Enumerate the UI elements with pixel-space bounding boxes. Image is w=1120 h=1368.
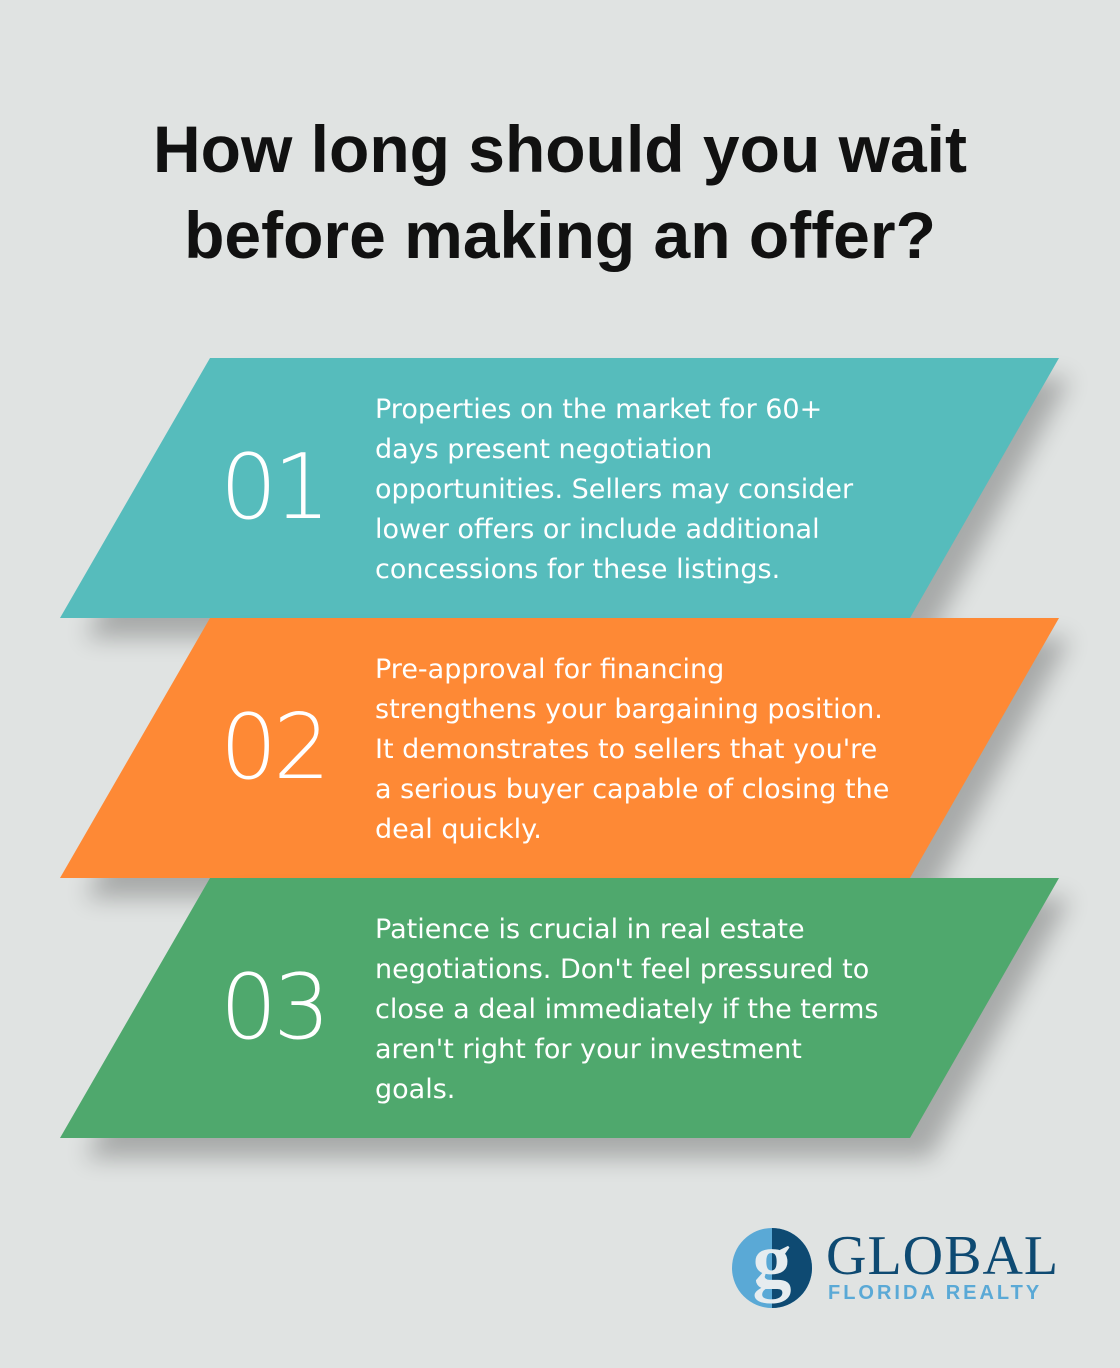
text 02: Pre-approval for financing: [375, 654, 724, 685]
text 02: deal quickly.: [375, 814, 542, 845]
icon: g circle: [732, 1228, 812, 1308]
title: [153, 112, 967, 272]
panel: 01 shape: [60, 358, 1070, 638]
text 02: strengthens your bargaining position.: [375, 694, 883, 725]
text 01: [375, 394, 854, 585]
text 03: aren't right for your investment: [375, 1034, 802, 1065]
text 03: [375, 914, 878, 1105]
text 01: Properties on the market for 60+: [375, 394, 822, 425]
number 03: 03: [220, 955, 327, 1060]
panel: 02 shape: [60, 618, 1070, 898]
text 03: close a deal immediately if the terms: [375, 994, 878, 1025]
title: before making an offer?: [184, 198, 936, 272]
text 02: It demonstrates to sellers that you're: [375, 734, 877, 765]
title: How long should you wait: [153, 112, 967, 186]
logo text: GLOBAL: [826, 1225, 1059, 1287]
text 02: [375, 654, 889, 845]
number 02: 02: [220, 695, 327, 800]
text 01: opportunities. Sellers may consider: [375, 474, 853, 505]
text 01: concessions for these listings.: [375, 554, 780, 585]
panel: 03 shape: [60, 878, 1070, 1158]
text 02: a serious buyer capable of closing the: [375, 774, 889, 805]
text 01: days present negotiation: [375, 434, 712, 465]
logo: [732, 1225, 1059, 1308]
text 03: Patience is crucial in real estate: [375, 914, 805, 945]
text 03: goals.: [375, 1074, 455, 1105]
text 03: negotiations. Don't feel pressured to: [375, 954, 869, 985]
number 01: 01: [220, 435, 327, 540]
text 01: lower offers or include additional: [375, 514, 820, 545]
logo: FLORIDA REALTY: [828, 1282, 1042, 1304]
